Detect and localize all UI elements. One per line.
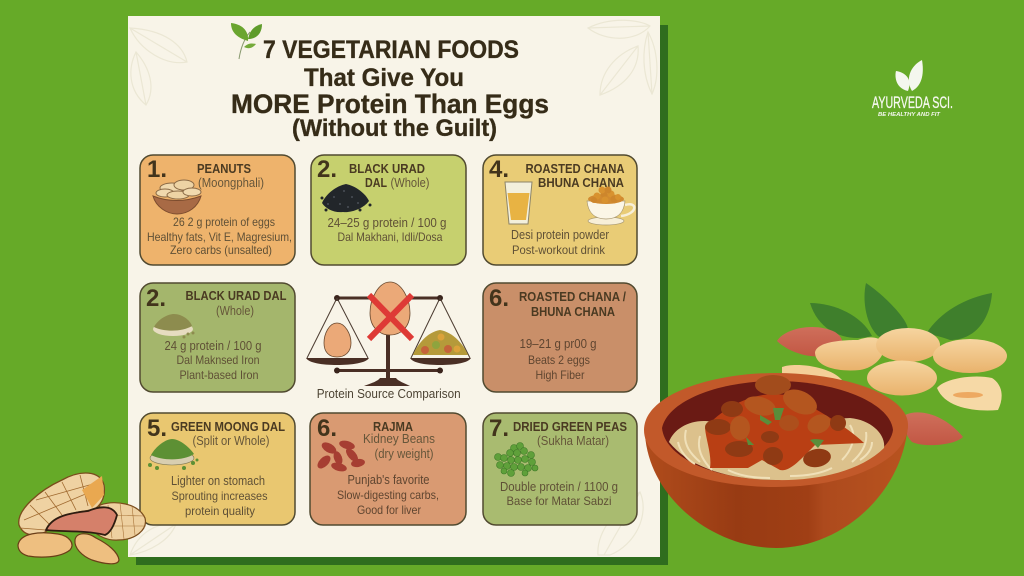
panel: 5 green moong dal: (Split or Whole) xyxy=(192,434,270,448)
panel: 1 peanuts: Healthy fats, Vit E, Magresium, xyxy=(147,230,292,244)
panel: 5 green moong dal xyxy=(140,413,295,525)
logo: ayurveda sci xyxy=(872,60,953,118)
icon: black lentil pile xyxy=(320,184,372,212)
panel: 7 dried green peas: (Sukha Matar) xyxy=(537,434,609,448)
panel: 2 black urad dal: Dal Makhani, Idli/Dosa xyxy=(338,230,443,244)
large shell xyxy=(19,473,104,535)
inner nut xyxy=(46,507,117,535)
panel: 4 roasted chana: 4. xyxy=(489,156,509,183)
panel: 4 roasted chana: Post-workout drink xyxy=(512,243,606,257)
panel: 2 black urad dal: 2. xyxy=(317,156,337,183)
icon: plate of dal xyxy=(153,314,194,338)
panel: 2 black urad dal whole: Plant-based Iron xyxy=(180,368,258,382)
panel: 1 peanuts: PEANUTS xyxy=(197,161,251,176)
chart: protein comparison scale: Protein Source Comparison xyxy=(317,387,461,401)
panel: 6 rajma: Punjab's favorite xyxy=(348,472,430,487)
rajma beans xyxy=(705,375,846,469)
panel: 2 black urad dal whole: 2. xyxy=(146,285,166,312)
panel: 6 rajma: (dry weight) xyxy=(374,447,434,461)
panel: 1 peanuts xyxy=(140,155,295,265)
panel: 5 green moong dal: 5. xyxy=(147,415,167,442)
panel: 6 roasted chana bhuna chana: 6. xyxy=(489,285,509,312)
panel: 2 black urad dal whole: 24 g protein / 100 g xyxy=(164,338,262,353)
icon: green sprout xyxy=(231,23,262,59)
panel: 2 black urad dal whole: BLACK URAD DAL xyxy=(186,288,287,303)
panel: 4 roasted chana xyxy=(483,155,637,265)
panel: 4 roasted chana: ROASTED CHANA xyxy=(526,161,625,176)
panel: 6 rajma: Kidney Beans xyxy=(363,432,435,446)
lower nuts xyxy=(18,533,72,557)
panel: 2 black urad dal whole: (Whole) xyxy=(216,304,254,318)
icon: kidney beans xyxy=(315,439,366,473)
panel: 6 rajma: Good for liver xyxy=(357,503,421,517)
icon: logo leaves xyxy=(895,60,923,91)
panel: 7 dried green peas: DRIED GREEN PEAS xyxy=(513,419,627,434)
illustration: leaves and peanuts right xyxy=(777,283,1007,445)
small egg xyxy=(324,323,351,357)
panel: 4 roasted chana: BHUNA CHANA xyxy=(538,175,625,190)
icon: moong plate xyxy=(148,439,198,470)
panel: 6 rajma: Slow-digesting carbs, xyxy=(337,488,439,502)
red peanut top xyxy=(777,327,843,357)
left pan xyxy=(306,358,369,365)
title: That Give You xyxy=(304,64,464,92)
panel: 1 peanuts: (Moongphali) xyxy=(198,176,264,190)
panel: 6 roasted chana bhuna chana: ROASTED CHANA / xyxy=(519,289,626,304)
panel: 7 dried green peas: Double protein / 1100 g xyxy=(500,479,618,494)
icon: glass of drink xyxy=(505,182,532,224)
panel: 6 roasted chana bhuna chana: Beats 2 eggs xyxy=(528,353,590,367)
title: MORE Protein Than Eggs xyxy=(231,89,549,119)
red peanut bottom xyxy=(904,412,963,445)
panel: 4 roasted chana: Desi protein powder xyxy=(511,227,610,242)
panel: 2 black urad dal: DAL xyxy=(365,175,387,190)
peanut 1 xyxy=(815,337,884,370)
panel: 2 black urad dal: (Whole) xyxy=(390,176,430,190)
peanut 4 xyxy=(867,360,937,396)
herb garnish xyxy=(746,408,824,448)
panel: 6 rajma xyxy=(310,413,466,525)
panel: 5 green moong dal: protein quality xyxy=(185,504,255,518)
half peanut xyxy=(937,376,1002,410)
illustration: peanuts bottom left xyxy=(18,473,146,564)
panel: 6 roasted chana bhuna chana: 19–21 g pr00 g xyxy=(520,336,596,351)
panel: 6 roasted chana bhuna chana: High Fiber xyxy=(536,368,584,382)
title: (Without the Guilt) xyxy=(292,115,497,142)
panel: 7 dried green peas: 7. xyxy=(489,415,509,442)
logo: ayurveda sci: BE HEALTHY AND FIT xyxy=(878,112,941,118)
poster shadow xyxy=(136,25,668,565)
half peanut behind bowl xyxy=(782,365,842,380)
panel: 5 green moong dal: Lighter on stomach xyxy=(171,473,265,488)
panel: 2 black urad dal: BLACK URAD xyxy=(349,161,425,176)
icon: cup of roasted chana xyxy=(587,186,634,225)
panel: 6 rajma: 6. xyxy=(317,415,337,442)
panel: 1 peanuts: Zero carbs (unsalted) xyxy=(170,243,272,257)
panel: 6 rajma: RAJMA xyxy=(373,419,414,434)
peanut 2 xyxy=(876,328,940,362)
panel: 7 dried green peas xyxy=(483,413,637,525)
panel: 2 black urad dal whole: Dal Maknsed Iron xyxy=(176,353,260,367)
mixed food xyxy=(413,330,468,355)
panel: 2 black urad dal: 24–25 g protein / 100 g xyxy=(328,215,446,230)
panel: 6 roasted chana bhuna chana xyxy=(483,283,637,392)
panel: 6 roasted chana bhuna chana: BHUNA CHANA xyxy=(531,304,616,319)
sauce xyxy=(705,394,864,470)
illustration: bowl of rajma rice xyxy=(644,373,908,548)
panel: 1 peanuts: 1. xyxy=(147,156,167,183)
chart: protein comparison scale xyxy=(306,282,471,401)
title: 7 VEGETARIAN FOODS xyxy=(263,36,519,64)
red cross xyxy=(369,295,412,339)
decorative corner leaves xyxy=(130,20,657,555)
right pan xyxy=(410,358,471,365)
panel: 5 green moong dal: GREEN MOONG DAL xyxy=(171,419,285,434)
rice xyxy=(669,418,884,480)
panel: 5 green moong dal: Sprouting increases xyxy=(172,489,268,503)
title xyxy=(231,23,549,142)
logo: ayurveda sci: AYURVEDA SCI. xyxy=(872,93,953,112)
panel: 2 black urad dal whole xyxy=(140,283,295,392)
panel: 7 dried green peas: Base for Matar Sabzi xyxy=(506,494,612,508)
icon: green peas xyxy=(494,442,538,476)
peanut 3 xyxy=(933,339,1007,373)
big egg xyxy=(370,282,410,335)
bowl inside xyxy=(662,381,893,480)
panel: 2 black urad dal xyxy=(311,155,466,265)
leaves xyxy=(810,283,992,340)
panel: 1 peanuts: 26 2 g protein of eggs xyxy=(173,215,275,229)
icon: bowl of peanuts xyxy=(153,180,201,214)
poster panel xyxy=(128,16,660,557)
bowl rim xyxy=(644,373,908,487)
small shell xyxy=(92,503,145,540)
bowl body xyxy=(645,425,908,548)
